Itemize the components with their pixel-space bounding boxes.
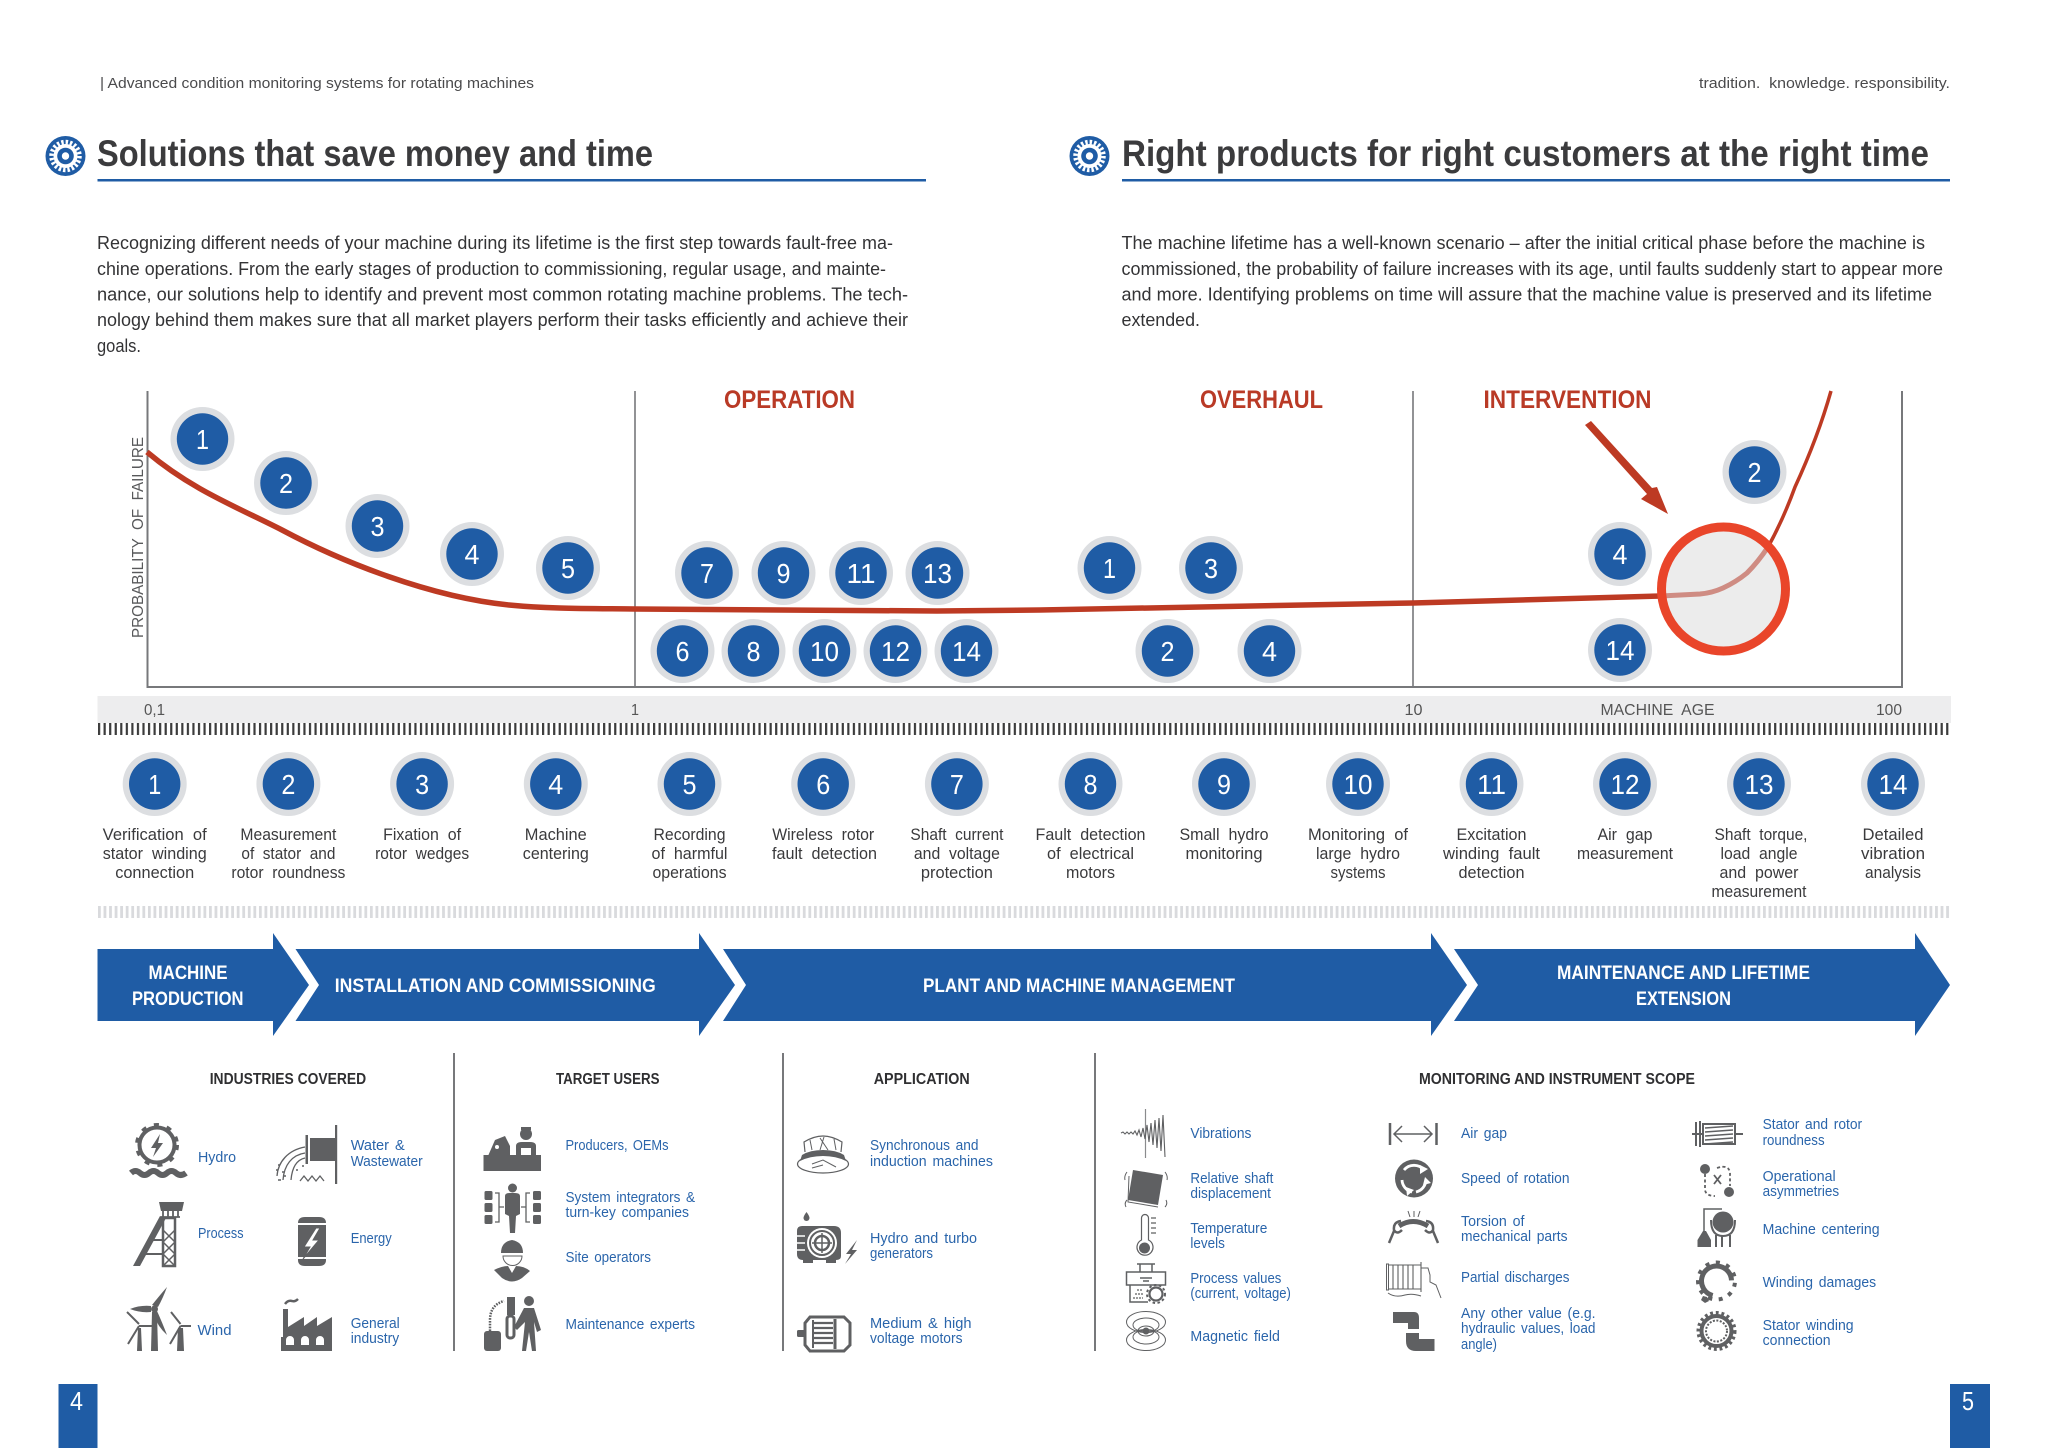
- lifecycle arrows: [98, 933, 1950, 1036]
- label: [1763, 1317, 1854, 1349]
- heading left: Solutions that save money and time: [97, 133, 653, 174]
- panel: target users: [484, 1071, 695, 1351]
- marker 13: 13: [923, 558, 952, 589]
- label: connection: [1763, 1332, 1831, 1349]
- solution 1: connection: [115, 864, 194, 882]
- solution 7: and voltage: [914, 845, 1000, 863]
- marker 11: [829, 541, 893, 605]
- label: levels: [1190, 1235, 1225, 1252]
- icon: medium and high voltage motors: [797, 1317, 850, 1351]
- page number 4: 4: [70, 1386, 83, 1416]
- label: Torsion of: [1461, 1213, 1525, 1230]
- label: induction machines: [870, 1153, 993, 1170]
- icon: magnetic field: [1126, 1312, 1166, 1350]
- machine age scale: 0,1: [144, 702, 165, 719]
- label: [1190, 1170, 1274, 1202]
- arrow: maintenance and lifetime extension: EXTENSION: [1636, 989, 1731, 1010]
- label: Relative shaft: [1190, 1170, 1274, 1187]
- panel: monitoring and instrument scope: [1121, 1071, 1880, 1353]
- solution 10: systems: [1330, 864, 1386, 882]
- label: Any other value (e.g.: [1461, 1305, 1596, 1322]
- icon: system integrators: [484, 1184, 541, 1233]
- marker 8: 8: [746, 636, 760, 667]
- heading: INDUSTRIES COVERED: [210, 1071, 366, 1088]
- label: [870, 1137, 993, 1170]
- running header left: | Advanced condition monitoring systems for rotating machines: [100, 75, 534, 92]
- label: Vibrations: [1190, 1125, 1251, 1142]
- icon: stator winding connection: [1698, 1313, 1734, 1349]
- marker 12: [864, 619, 928, 683]
- icon: speed of rotation: [1395, 1160, 1433, 1198]
- label: Stator and rotor: [1763, 1116, 1862, 1133]
- solution 1: Verification of: [103, 826, 207, 844]
- marker intervention 4: [1588, 522, 1652, 586]
- marker 8: [722, 619, 786, 683]
- intro text right: and more. Identifying problems on time will assure that the machine value is preserved and its lifetime: [1122, 284, 1932, 304]
- intro text left: goals.: [97, 336, 141, 356]
- label: Energy: [351, 1230, 392, 1247]
- solution 7: 7: [950, 769, 964, 800]
- marker 12: 12: [881, 636, 910, 667]
- solution 4: centering: [523, 845, 589, 863]
- page number 4: [58, 1384, 98, 1448]
- label: asymmetries: [1763, 1183, 1839, 1200]
- solution 5: [652, 752, 728, 882]
- label: Site operators: [566, 1249, 651, 1266]
- marker 2: 2: [279, 468, 293, 499]
- solution 3: rotor wedges: [375, 845, 469, 863]
- solution 10: 10: [1344, 769, 1372, 800]
- solution 4: Machine: [525, 826, 587, 844]
- label: [870, 1230, 977, 1262]
- label: [1461, 1305, 1596, 1353]
- icon: winding damages: [1694, 1258, 1739, 1304]
- icon: gear left: [46, 136, 86, 176]
- solution 11: winding fault: [1442, 845, 1540, 863]
- marker overhaul 3: [1179, 536, 1243, 600]
- chart: probability of failure over machine age: [130, 386, 1902, 687]
- solution 1: [103, 752, 207, 882]
- label: angle): [1461, 1336, 1497, 1353]
- solution 9: Small hydro: [1180, 826, 1268, 844]
- heading: APPLICATION: [874, 1071, 970, 1088]
- marker intervention 2: [1722, 440, 1786, 504]
- arrow: machine production: [98, 933, 309, 1036]
- label: Wastewater: [351, 1153, 423, 1170]
- marker intervention 2: 2: [1748, 457, 1762, 488]
- solution 8: of electrical: [1047, 845, 1134, 863]
- icon: operational asymmetries: [1700, 1164, 1734, 1197]
- solution 13: Shaft torque,: [1714, 826, 1808, 844]
- intro text right: [1122, 233, 1943, 330]
- solution 13: 13: [1744, 769, 1774, 800]
- solution 11: 11: [1477, 769, 1506, 800]
- label: Hydro and turbo: [870, 1230, 977, 1247]
- arrow: installation and commissioning: INSTALLATION AND COMMISSIONING: [335, 976, 656, 997]
- solution 12: [1577, 752, 1673, 863]
- arrow: plant and machine management: [723, 933, 1467, 1036]
- icon: temperature: [1137, 1215, 1156, 1255]
- solution 6: Wireless rotor: [772, 826, 875, 844]
- marker 4: 4: [464, 539, 480, 570]
- label: [1461, 1213, 1568, 1245]
- icon: producers: [484, 1127, 541, 1171]
- solution 14: Detailed: [1862, 826, 1924, 844]
- marker overhaul 4: 4: [1262, 636, 1277, 667]
- solution 8: motors: [1066, 864, 1115, 882]
- y axis label: PROBABILITY OF FAILURE: [130, 437, 147, 638]
- failure-curve markers: [170, 407, 1786, 683]
- solution 14: analysis: [1865, 864, 1921, 882]
- marker 13: [906, 541, 970, 605]
- label: mechanical parts: [1461, 1228, 1568, 1245]
- machine age scale: [98, 696, 1951, 735]
- icon: any other value: [1393, 1312, 1434, 1351]
- icon: torsion of mechanical parts: [1389, 1211, 1438, 1243]
- solution 8: Fault detection: [1036, 826, 1146, 844]
- marker intervention 14: 14: [1606, 635, 1634, 666]
- label: Magnetic field: [1190, 1328, 1280, 1345]
- arrow: maintenance and lifetime extension: MAINTENANCE AND LIFETIME: [1557, 963, 1810, 984]
- icon: process values: [1126, 1264, 1166, 1303]
- marker 1: [170, 407, 234, 471]
- arrow: machine production: MACHINE: [148, 963, 228, 984]
- solution 9: [1180, 752, 1268, 863]
- solution 5: Recording: [654, 826, 726, 844]
- marker intervention 14: [1588, 618, 1652, 682]
- label: Partial discharges: [1461, 1269, 1570, 1286]
- solution 10: large hydro: [1316, 845, 1400, 863]
- solution 3: 3: [415, 769, 429, 800]
- solution 11: [1442, 752, 1540, 882]
- marker 3: [346, 494, 410, 558]
- solution 12: 12: [1610, 769, 1640, 800]
- machine age scale: 10: [1404, 702, 1423, 719]
- marker overhaul 2: 2: [1160, 636, 1174, 667]
- marker overhaul 4: [1238, 619, 1302, 683]
- solution 7: protection: [921, 864, 993, 882]
- panel: application: [797, 1071, 993, 1351]
- icon: wind turbines: [127, 1287, 191, 1351]
- icon: hydro and turbo generators: [797, 1212, 857, 1264]
- icon: machine centering: [1698, 1209, 1735, 1247]
- marker 5: [536, 536, 600, 600]
- icon: water and wastewater: [276, 1125, 337, 1184]
- marker 10: 10: [810, 636, 839, 667]
- icon: partial discharges: [1386, 1262, 1441, 1298]
- intro text left: [97, 233, 908, 356]
- marker 5: 5: [561, 553, 575, 584]
- label: Maintenance experts: [566, 1316, 695, 1333]
- label: Speed of rotation: [1461, 1170, 1570, 1187]
- marker 11: 11: [846, 558, 876, 589]
- heading: TARGET USERS: [556, 1071, 660, 1088]
- intro text right: extended.: [1122, 310, 1200, 330]
- label: turn-key companies: [566, 1204, 689, 1221]
- label: Wind: [198, 1322, 232, 1339]
- solution 3: [375, 752, 469, 863]
- running header right: tradition. knowledge. responsibility.: [1699, 75, 1950, 92]
- solution 6: [772, 752, 877, 863]
- marker 14: 14: [952, 636, 981, 667]
- solution 14: vibration: [1861, 845, 1925, 863]
- heading right: Right products for right customers at the right time: [1122, 133, 1929, 174]
- icon: process: [133, 1202, 184, 1266]
- arrow: installation and commissioning: [296, 933, 735, 1036]
- marker overhaul 1: 1: [1103, 553, 1116, 584]
- label: Machine centering: [1763, 1221, 1880, 1238]
- label: [566, 1189, 695, 1221]
- solution 8: 8: [1084, 769, 1098, 800]
- solution 13: load angle: [1720, 845, 1798, 863]
- intervention circle: [1661, 527, 1786, 651]
- machine age scale: 100: [1876, 702, 1902, 719]
- page number 5: [1950, 1384, 1990, 1448]
- solution 2: [231, 752, 345, 882]
- marker overhaul 3: 3: [1204, 553, 1218, 584]
- machine age scale: MACHINE AGE: [1600, 702, 1714, 719]
- solution 5: operations: [652, 864, 726, 882]
- marker 1: 1: [196, 424, 209, 455]
- icon: energy: [298, 1217, 326, 1266]
- solution 11: detection: [1458, 864, 1524, 882]
- label: generators: [870, 1245, 933, 1262]
- marker 9: 9: [776, 558, 790, 589]
- label: Winding damages: [1763, 1274, 1876, 1291]
- arrow to intervention point: [1585, 421, 1668, 514]
- solution 4: 4: [548, 769, 563, 800]
- intro text left: Recognizing different needs of your machine during its lifetime is the first step towards fault-free ma-: [97, 233, 893, 253]
- icon: gear right: [1070, 136, 1110, 176]
- icon: vibrations: [1121, 1109, 1165, 1158]
- intro text right: The machine lifetime has a well-known scenario – after the initial critical phase before the machine is: [1122, 233, 1925, 253]
- label: [1190, 1270, 1291, 1302]
- panel: industries covered: [127, 1071, 423, 1351]
- solution 7: [910, 752, 1004, 882]
- intro text right: commissioned, the probability of failure increases with its age, until faults suddenly start to appear more: [1122, 259, 1943, 279]
- icon: general industry: [281, 1299, 332, 1351]
- label: Air gap: [1461, 1125, 1507, 1142]
- marker 7: [675, 541, 739, 605]
- label: [351, 1137, 423, 1170]
- solution 13: [1712, 752, 1808, 901]
- label: (current, voltage): [1190, 1285, 1291, 1302]
- marker 2: [254, 451, 318, 515]
- solution 14: 14: [1878, 769, 1908, 800]
- marker overhaul 1: [1078, 536, 1142, 600]
- marker 3: 3: [370, 511, 384, 542]
- solution 13: and power: [1720, 864, 1799, 882]
- solution 2: Measurement: [240, 826, 337, 844]
- label: roundness: [1763, 1132, 1825, 1149]
- icon: maintenance experts: [484, 1296, 541, 1351]
- solution 3: Fixation of: [383, 826, 461, 844]
- phase label: intervention: INTERVENTION: [1484, 386, 1652, 414]
- label: hydraulic values, load: [1461, 1320, 1596, 1337]
- solution 10: Monitoring of: [1308, 826, 1408, 844]
- label: Process values: [1190, 1270, 1281, 1287]
- label: Hydro: [198, 1149, 236, 1166]
- label: [351, 1315, 400, 1347]
- icon: hydro: [131, 1125, 186, 1175]
- solution 1: 1: [148, 769, 161, 800]
- marker 9: [752, 541, 816, 605]
- marker 4: [440, 522, 504, 586]
- icon: relative shaft displacement: [1125, 1170, 1167, 1207]
- marker 6: [650, 619, 714, 683]
- arrow: plant and machine management: PLANT AND MACHINE MANAGEMENT: [923, 976, 1235, 997]
- solution 7: Shaft current: [910, 826, 1004, 844]
- failure curve: [147, 452, 1662, 611]
- solution 8: [1036, 752, 1146, 882]
- solution 2: rotor roundness: [231, 864, 345, 882]
- arrow: machine production: PRODUCTION: [132, 989, 244, 1010]
- heading: MONITORING AND INSTRUMENT SCOPE: [1419, 1071, 1695, 1088]
- icon: air gap: [1390, 1123, 1436, 1145]
- solution 11: Excitation: [1456, 826, 1526, 844]
- marker 14: [934, 619, 998, 683]
- solution 12: measurement: [1577, 845, 1673, 863]
- solution 2: 2: [281, 769, 295, 800]
- solution 12: Air gap: [1598, 826, 1652, 844]
- solution 5: of harmful: [652, 845, 728, 863]
- icon: synchronous and induction machines: [798, 1136, 848, 1173]
- label: displacement: [1190, 1185, 1272, 1202]
- intro text left: chine operations. From the early stages of production to commissioning, regular usage, and mainte-: [97, 259, 886, 279]
- solution 9: monitoring: [1186, 845, 1262, 863]
- solution 1: stator winding: [103, 845, 207, 863]
- solution 10: [1308, 752, 1408, 882]
- label: [1763, 1116, 1862, 1149]
- label: voltage motors: [870, 1330, 962, 1347]
- label: [1763, 1168, 1839, 1200]
- failure curve: steep rise after intervention: [1768, 391, 1831, 547]
- label: [1190, 1220, 1267, 1252]
- phase label: operation: OPERATION: [724, 386, 855, 414]
- intro text left: nology behind them makes sure that all market players perform their tasks efficiently and achieve their: [97, 310, 908, 330]
- solution 13: measurement: [1712, 883, 1807, 901]
- solution 6: 6: [816, 769, 830, 800]
- solution 14: [1861, 752, 1925, 882]
- solution 2: of stator and: [241, 845, 335, 863]
- label: Synchronous and: [870, 1137, 978, 1154]
- label: [870, 1315, 972, 1347]
- marker 7: 7: [700, 558, 714, 589]
- intro text left: nance, our solutions help to identify and prevent most common rotating machine problems. The tech-: [97, 284, 908, 304]
- label: System integrators &: [566, 1189, 695, 1206]
- icon: site operators: [494, 1240, 530, 1282]
- label: Stator winding: [1763, 1317, 1854, 1334]
- label: Process: [198, 1225, 244, 1242]
- solution 6: fault detection: [772, 845, 877, 863]
- marker 10: [792, 619, 856, 683]
- solution 4: [523, 752, 589, 863]
- phase label: overhaul: OVERHAUL: [1200, 386, 1323, 414]
- arrow: maintenance and lifetime extension: [1454, 933, 1950, 1036]
- label: Temperature: [1190, 1220, 1267, 1237]
- machine age scale: 1: [631, 702, 639, 719]
- page number 5: 5: [1962, 1386, 1974, 1416]
- label: industry: [351, 1330, 400, 1347]
- marker 6: 6: [676, 636, 690, 667]
- label: General: [351, 1315, 400, 1332]
- label: Producers, OEMs: [566, 1137, 668, 1154]
- solution 5: 5: [682, 769, 696, 800]
- marker intervention 4: 4: [1612, 539, 1628, 570]
- marker overhaul 2: [1136, 619, 1200, 683]
- icon: stator and rotor roundness: [1692, 1121, 1743, 1147]
- label: Water &: [351, 1137, 405, 1154]
- solution 9: 9: [1217, 769, 1231, 800]
- solution legend row: [103, 752, 1925, 901]
- label: Operational: [1763, 1168, 1836, 1185]
- label: Medium & high: [870, 1315, 972, 1332]
